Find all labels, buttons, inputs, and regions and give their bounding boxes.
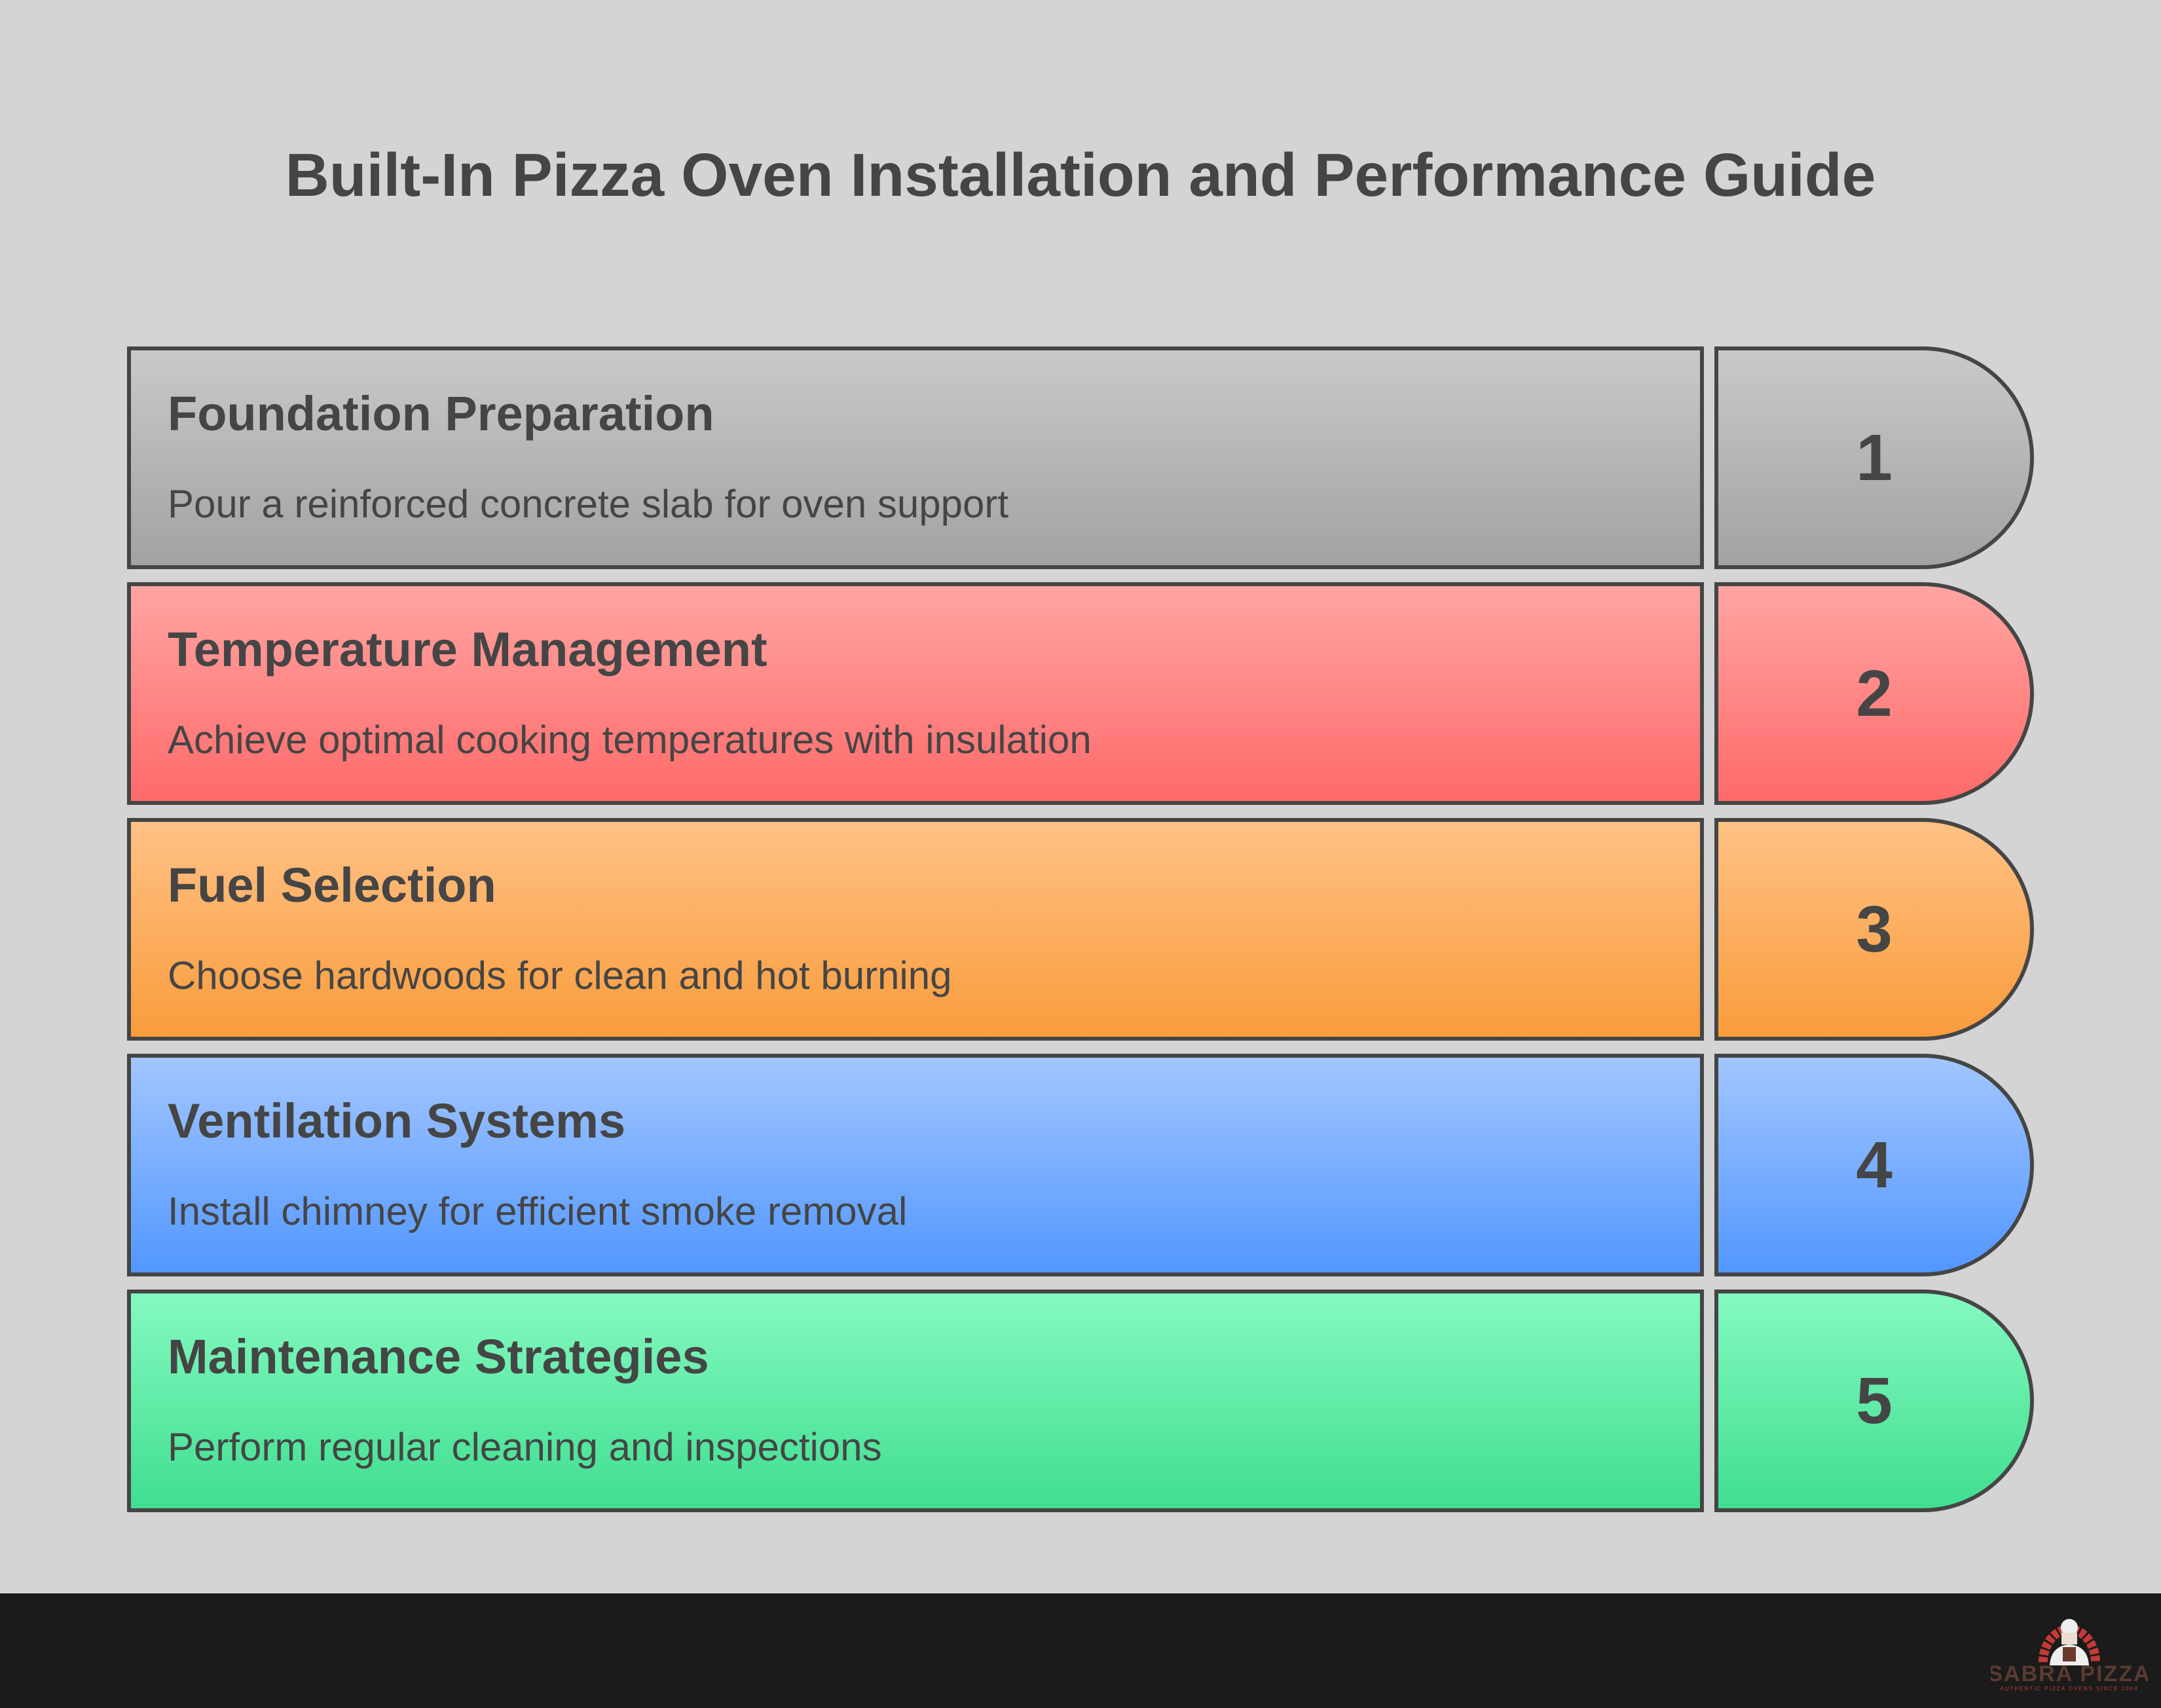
panel: maintenance strategies: Perform regular cleaning and inspections: [168, 1425, 882, 1469]
panel: foundation preparation: [127, 346, 1704, 569]
panel: foundation preparation: Foundation Preparation: [168, 386, 714, 441]
number tab 4: 4: [1856, 1128, 1893, 1202]
number tab 5: [1714, 1290, 2034, 1512]
panel: ventilation systems: Ventilation Systems: [168, 1094, 625, 1148]
panel: temperature management: Achieve optimal cooking temperatures with insulation: [168, 718, 1092, 762]
footer bar: [0, 1593, 2161, 1708]
number tab 2: 2: [1856, 657, 1893, 730]
panel: temperature management: Temperature Management: [168, 622, 767, 677]
number tab 3: 3: [1856, 893, 1893, 966]
title: Built-In Pizza Oven Installation and Performance Guide: [286, 141, 1875, 209]
number tab 1: [1714, 346, 2034, 569]
number tab 5: 5: [1856, 1364, 1893, 1438]
row 3: fuel selection: [127, 818, 2034, 1041]
logo: sabra pizza: [1991, 1619, 2148, 1692]
panel: foundation preparation: Pour a reinforced concrete slab for oven support: [168, 482, 1008, 526]
panel: maintenance strategies: Maintenance Strategies: [168, 1329, 709, 1384]
logo: sabra pizza: AUTHENTIC PIZZA OVENS SINCE 2004: [2000, 1686, 2139, 1692]
panel: fuel selection: [127, 818, 1704, 1041]
row 1: foundation preparation: [127, 346, 2034, 569]
panel: temperature management: [127, 582, 1704, 805]
number tab 3: [1714, 818, 2034, 1041]
panel: fuel selection: Fuel Selection: [168, 858, 496, 912]
number tab 2: [1714, 582, 2034, 805]
number tab 4: [1714, 1054, 2034, 1276]
row 4: ventilation systems: [127, 1054, 2034, 1276]
row 5: maintenance strategies: [127, 1290, 2034, 1512]
row 2: temperature management: [127, 582, 2034, 805]
panel: ventilation systems: Install chimney for efficient smoke removal: [168, 1189, 907, 1233]
panel: maintenance strategies: [127, 1290, 1704, 1512]
number tab 1: 1: [1856, 421, 1893, 494]
panel: ventilation systems: [127, 1054, 1704, 1276]
panel: fuel selection: Choose hardwoods for clean and hot burning: [168, 954, 951, 997]
